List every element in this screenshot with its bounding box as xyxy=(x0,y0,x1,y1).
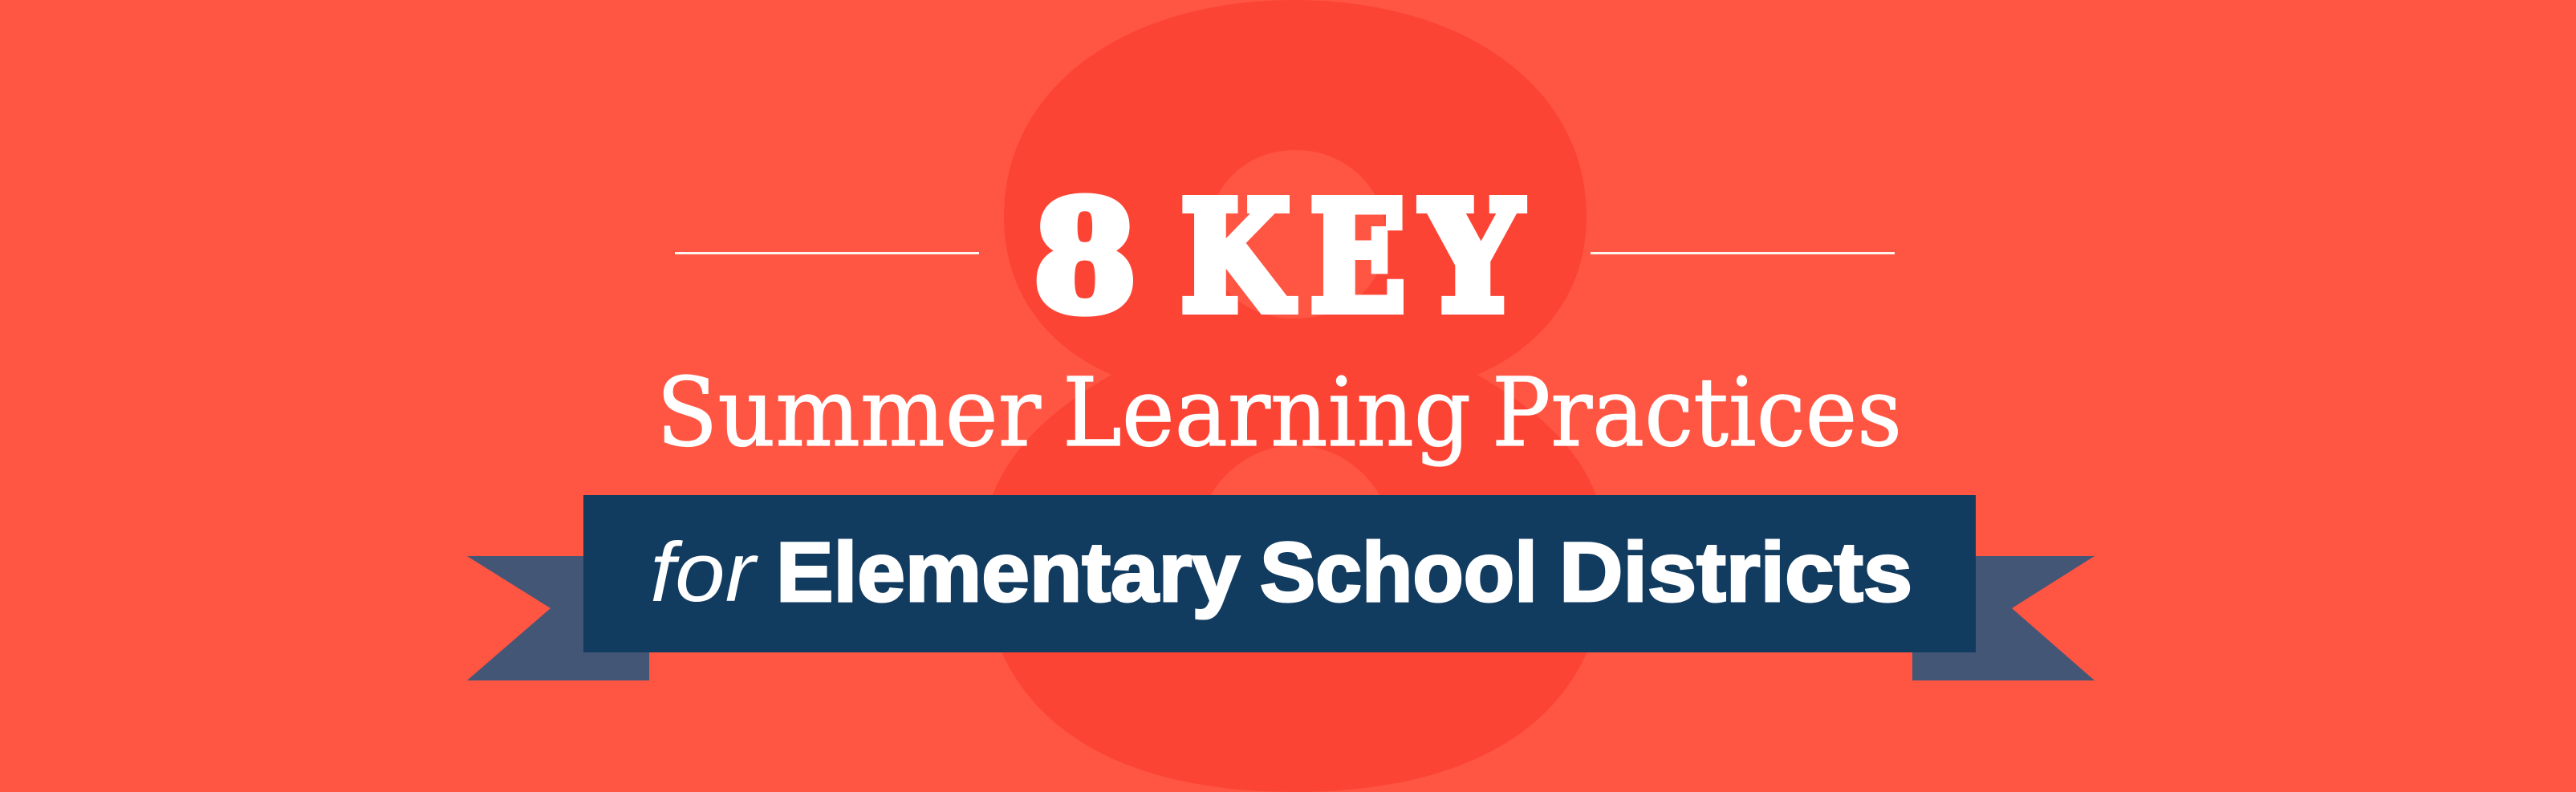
ribbon tail right xyxy=(1912,556,2095,680)
large background numeral 8 xyxy=(982,0,1607,792)
banner text: for xyxy=(650,526,758,619)
heading: 8 KEY xyxy=(1034,169,1523,346)
ribbon banner xyxy=(583,495,1976,652)
left divider line xyxy=(675,252,979,254)
right divider line xyxy=(1591,252,1895,254)
subheading: Summer Learning Practices: Learning xyxy=(1062,357,1471,468)
banner text: Districts xyxy=(1559,526,1912,619)
heading: 8 KEY: 8 xyxy=(1034,169,1136,346)
banner text xyxy=(650,526,1912,619)
banner text: School xyxy=(1260,526,1538,619)
heading: 8 KEY: Y xyxy=(1420,169,1523,346)
heading: 8 KEY: E xyxy=(1310,169,1406,346)
ribbon tail left xyxy=(467,556,649,680)
heading: 8 KEY: K xyxy=(1180,169,1295,346)
banner text: Elementary xyxy=(776,526,1240,619)
subheading: Summer Learning Practices: Practices xyxy=(1492,357,1902,468)
subheading: Summer Learning Practices: Summer xyxy=(656,357,1042,468)
subheading: Summer Learning Practices xyxy=(656,357,1902,468)
